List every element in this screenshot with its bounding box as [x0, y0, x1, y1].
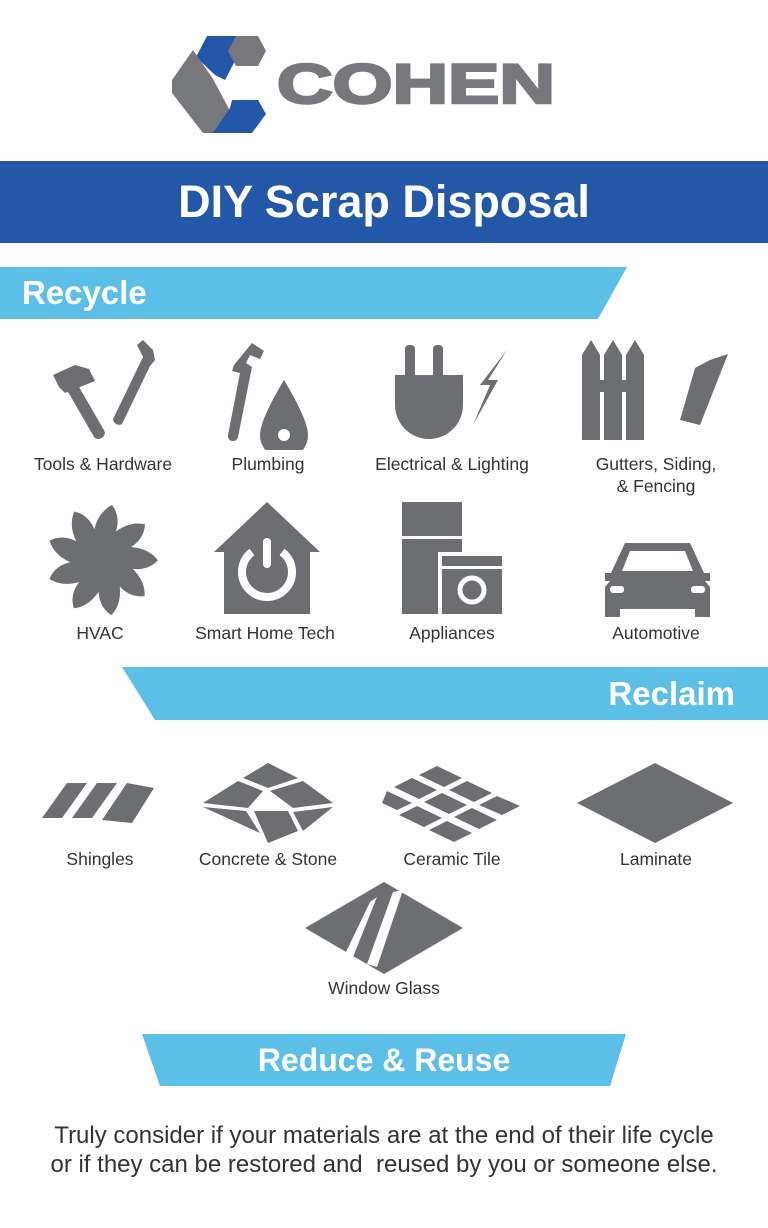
icon: appliances: [402, 502, 502, 614]
text block: advice: or if they can be restored and reused by you or someone else.: [50, 1151, 718, 1178]
label: Gutters, Siding,: [596, 454, 716, 474]
icon: hvac fan: [49, 505, 158, 616]
icon: shingles: [42, 783, 154, 823]
icon: concrete & stone: [203, 763, 333, 843]
section bar: Reclaim: Reclaim: [608, 675, 735, 712]
label: Shingles: [66, 849, 134, 869]
label: Laminate: [620, 849, 692, 869]
text block: advice: [50, 1122, 718, 1178]
label: Tools & Hardware: [34, 454, 172, 474]
title banner: DIY Scrap Disposal: [178, 176, 590, 227]
label: Automotive: [612, 623, 700, 643]
label: Ceramic Tile: [403, 849, 501, 869]
label: Window Glass: [328, 978, 440, 998]
icon: plumbing: [228, 343, 308, 450]
section bar: Reduce & Reuse: [142, 1034, 626, 1086]
label: Appliances: [409, 623, 495, 643]
icon: smart home: [214, 502, 320, 614]
title banner: [0, 161, 768, 243]
section bar: Reduce & Reuse: Reduce & Reuse: [258, 1042, 510, 1078]
label: Electrical & Lighting: [375, 454, 529, 474]
icon: ceramic tile: [382, 766, 520, 842]
section bar: Recycle: [0, 267, 627, 319]
label: HVAC: [76, 623, 124, 643]
icon: window glass: [305, 882, 463, 974]
text block: advice: Truly consider if your materials are at the end of their life cycle: [54, 1122, 714, 1149]
logo text: COHEN: [277, 52, 555, 115]
label: [596, 454, 716, 496]
icon: tools: [53, 340, 155, 439]
icon: car: [605, 543, 710, 617]
label: Smart Home Tech: [195, 623, 335, 643]
icon: electrical: [395, 345, 507, 439]
section bar: Reclaim: [122, 667, 768, 720]
icon: logo mark: [172, 36, 266, 133]
icon: laminate: [577, 763, 733, 843]
label: Concrete & Stone: [199, 849, 337, 869]
logo: [172, 36, 555, 133]
label: Plumbing: [232, 454, 304, 474]
section bar: Recycle: Recycle: [22, 274, 147, 311]
icon: fencing: [582, 340, 728, 440]
label: & Fencing: [617, 476, 695, 496]
